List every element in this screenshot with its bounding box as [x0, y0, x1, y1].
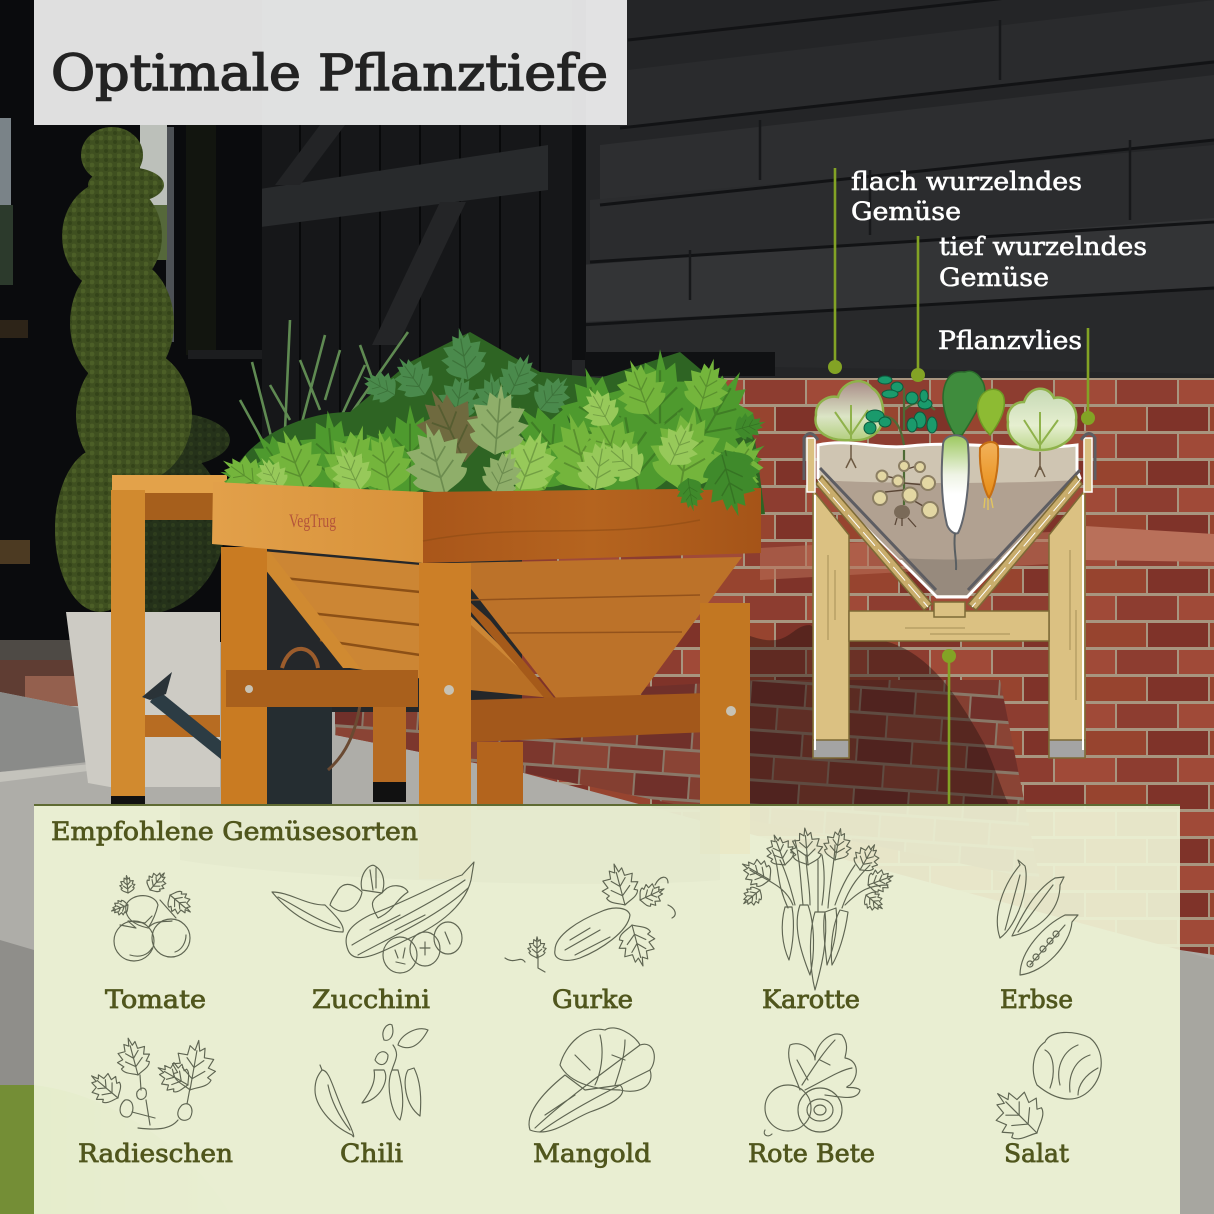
icon: pea pods: [997, 860, 1078, 975]
dark barn door: [253, 0, 572, 460]
weatherboard siding: [570, 0, 1214, 378]
labels: vegetable names, row 2: Chili: [340, 1139, 403, 1168]
pavement: [0, 692, 1214, 1214]
dark wall behind planter: [262, 450, 522, 712]
brick wall: [335, 370, 1214, 955]
foliage in planter: [211, 320, 780, 521]
callout: tief wurzelndes Gemüse: Gemüse: [939, 263, 1049, 292]
labels: vegetable names, row 1: Gurke: [552, 985, 633, 1014]
icon: radishes: [82, 1034, 220, 1129]
plant: white radish: [942, 371, 985, 570]
white plant pot: [66, 612, 220, 787]
panel: Empfohlene Gemüsesorten: [34, 804, 1180, 1214]
leaves drooping over planter edge: [674, 448, 765, 524]
title: Optimale Pflanztiefe: [51, 44, 608, 102]
planter: wooden trough: [212, 482, 761, 810]
icon: chilies: [315, 1024, 428, 1137]
icon: chard: [529, 1028, 654, 1132]
icon: carrots: [736, 826, 897, 990]
callout: flach wurzelndes Gemüse: Gemüse: [851, 197, 961, 226]
labels: vegetable names, row 2: Salat: [1004, 1139, 1069, 1168]
title banner: [34, 0, 627, 125]
callout: tief wurzelndes Gemüse: [911, 232, 1147, 382]
labels: vegetable names, row 2: Rote Bete: [748, 1139, 875, 1168]
labels: vegetable names, row 1: [105, 985, 1073, 1014]
icon: tomato: [109, 867, 198, 961]
callout: flach wurzelndes Gemüse: flach wurzelndes: [851, 167, 1082, 196]
callout: Pflanzvlies: Pflanzvlies: [938, 326, 1082, 355]
plant: green lettuce: [1008, 389, 1076, 477]
ghosted scene beneath panel: [34, 804, 750, 1214]
diagram: legs and cross bar: [813, 490, 1085, 758]
icon: beetroot: [764, 1034, 860, 1136]
labels: vegetable names, row 2: Radieschen: [78, 1139, 233, 1168]
topiary spiral tree: [55, 127, 230, 615]
plant: potato: [864, 376, 938, 527]
icon: lettuce and cabbage: [981, 1032, 1101, 1150]
icon: cucumber: [505, 859, 675, 972]
connector line to vegetable panel: [942, 649, 956, 806]
plant: red lettuce: [815, 381, 883, 468]
labels: vegetable names, row 2: Mangold: [533, 1139, 651, 1168]
diagram: soil trough: [818, 443, 1080, 597]
callout: Pflanzvlies: [938, 326, 1095, 425]
dark window facade: [0, 0, 262, 706]
callout: tief wurzelndes Gemüse: tief wurzelndes: [939, 232, 1147, 261]
cross-section diagram of planter: [804, 371, 1095, 758]
planter bench: far frame: [111, 475, 406, 804]
labels: vegetable names, row 2: [78, 1139, 1069, 1168]
labels: vegetable names, row 1: Tomate: [105, 985, 206, 1014]
callout: flach wurzelndes Gemüse: [828, 167, 1082, 374]
VegTrug logo: VegTrug: [289, 511, 336, 532]
diagram: sloped timber walls and bracket: [804, 433, 1095, 617]
heading: Empfohlene Gemüsesorten: [51, 817, 418, 846]
labels: vegetable names, row 1: Karotte: [762, 985, 860, 1014]
watering can: [142, 649, 360, 806]
plant: carrot: [978, 389, 1004, 510]
labels: vegetable names, row 1: Erbse: [1000, 985, 1073, 1014]
icon: zucchini: [272, 862, 474, 973]
labels: vegetable names, row 1: Zucchini: [312, 985, 430, 1014]
